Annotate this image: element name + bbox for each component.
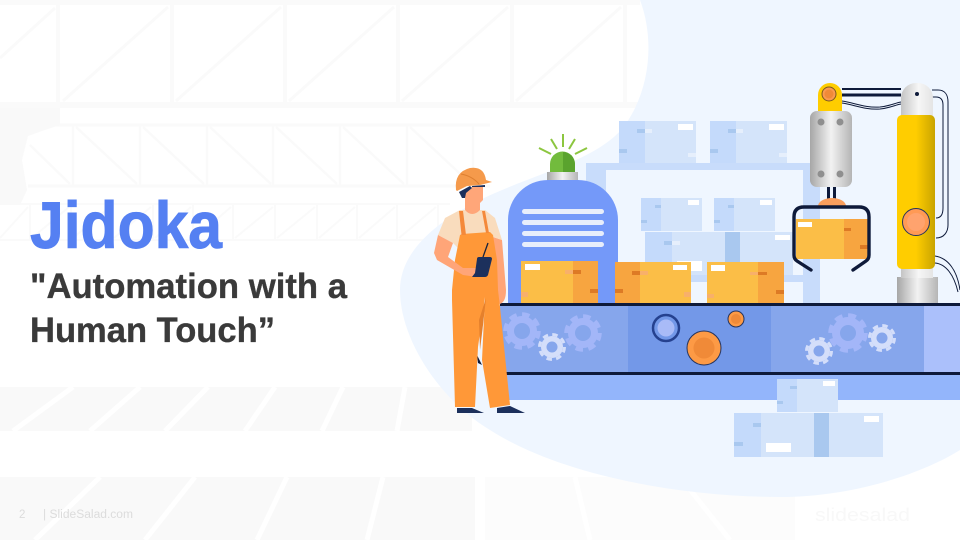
conveyor orange boxes — [521, 261, 784, 303]
subtitle: Human Touch” — [30, 310, 275, 350]
watermark logo text: slidesalad — [815, 505, 910, 525]
near arm — [434, 235, 478, 277]
conveyor belt — [497, 303, 960, 400]
robot gripper head — [810, 83, 852, 206]
gripper claw — [794, 207, 869, 270]
footer page number and site: 2 — [19, 509, 25, 521]
hard hat — [456, 168, 492, 191]
subtitle — [30, 266, 347, 350]
head — [465, 187, 483, 204]
control dials — [653, 311, 744, 365]
pale blue background blob — [400, 0, 960, 497]
robot arm column — [897, 83, 938, 303]
gears left — [506, 314, 600, 360]
signal beacon — [539, 134, 587, 181]
stacked boxes below conveyor — [734, 379, 883, 457]
worker — [434, 168, 525, 413]
machine cabinet — [508, 180, 618, 303]
radio — [483, 243, 488, 257]
robot wires — [842, 89, 960, 292]
subtitle: "Automation with a — [30, 266, 347, 306]
gears right — [806, 316, 894, 364]
neck — [465, 198, 480, 214]
screen text lines — [522, 209, 604, 247]
worker shoes — [457, 406, 525, 413]
box held by gripper — [796, 219, 868, 259]
shelf frame — [586, 163, 820, 303]
shelf boxes, light blue — [619, 121, 793, 275]
footer page number and site: | SlideSalad.com — [43, 509, 133, 521]
overalls — [452, 232, 510, 408]
shirt — [438, 210, 502, 250]
far arm — [493, 237, 506, 304]
title: Jidoka — [30, 188, 223, 262]
